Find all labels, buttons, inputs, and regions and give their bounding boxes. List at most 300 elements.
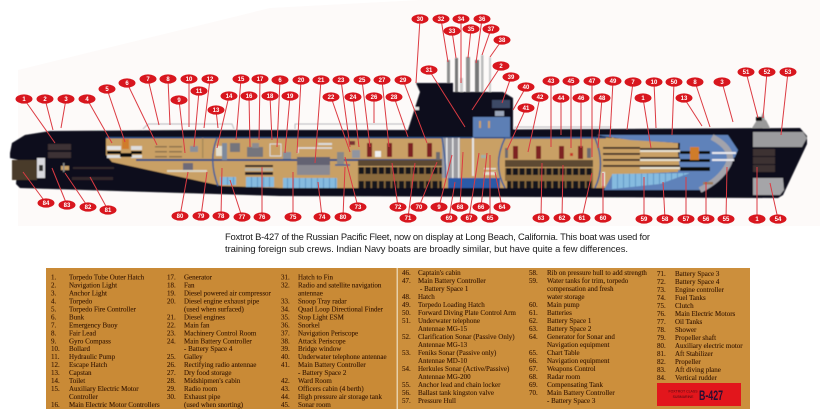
legend column items 17-30: 25. (167, 353, 176, 361)
callout 74: 74 (319, 215, 326, 221)
legend column items 17-30: 21. (167, 314, 176, 322)
callout 71 (400, 163, 416, 223)
legend column items 58-70: 58. (529, 269, 538, 277)
callout 56: 56 (703, 217, 710, 223)
aft machinery (216, 143, 291, 175)
callout 25 (354, 75, 370, 147)
callout 73: 73 (355, 205, 362, 211)
legend column items 17-30: 30. (167, 393, 176, 401)
callout 67: 67 (466, 216, 473, 222)
legend column items 58-70: 61. (529, 309, 538, 317)
legend column items 1-16: Torpedo (69, 298, 93, 306)
caption (225, 231, 650, 254)
callout 37 (482, 24, 500, 55)
callout 19 (282, 91, 298, 153)
callout 48 (594, 93, 610, 148)
forward torpedoes (640, 147, 736, 184)
legend column items 31-45: 33. (281, 298, 290, 306)
legend column items 1-16: 15. (51, 385, 60, 393)
callout 1 aft (16, 94, 55, 143)
callout 23 (332, 75, 350, 147)
legend column items 31-45: Attack Periscope (298, 338, 346, 346)
callout 72: 72 (395, 205, 402, 211)
legend column items 46-57: 56. (402, 389, 411, 397)
legend column items 31-45: 39. (281, 345, 290, 353)
legend column items 17-30: Machinery Control Room (184, 330, 257, 338)
legend column items 1-16: Toilet (69, 377, 85, 385)
callout 2 fin: 2 (499, 64, 503, 70)
callout 80 aft: 80 (177, 214, 184, 220)
callout 28: 28 (391, 95, 398, 101)
legend column items 17-30: 19. (167, 290, 176, 298)
callout 37: 37 (488, 27, 495, 33)
callout 59: 59 (641, 217, 648, 223)
legend column items 31-45: 36. (281, 322, 290, 330)
legend column items 46-57: Herkules Sonar (Active/Passive) (418, 365, 510, 373)
legend column items 71-84: 81. (657, 350, 666, 358)
callout 78 (212, 168, 230, 221)
legend column items 58-70: 64. (529, 333, 538, 341)
fuel tanks (283, 178, 337, 188)
legend column items 71-84: 73. (657, 286, 666, 294)
callout 21: 21 (318, 78, 325, 84)
callout 16 (240, 91, 258, 147)
legend column items 58-70: 68. (529, 373, 538, 381)
legend column items 1-16: 12. (51, 361, 60, 369)
legend column items 1-16: 6. (51, 314, 56, 322)
callout 11 (190, 86, 208, 147)
legend column items 71-84: Battery Space 3 (675, 270, 720, 278)
legend column items 58-70 (529, 269, 647, 405)
callout 39 (502, 72, 520, 103)
legend column items 1-16: Bunk (69, 314, 85, 322)
legend column items 17-30: 18. (167, 282, 176, 290)
callout 40: 40 (523, 85, 530, 91)
callout 77 (230, 180, 250, 222)
callout 4: 4 (85, 97, 89, 103)
legend column items 58-70: Generator for Sonar and (547, 333, 615, 341)
callout 48: 48 (599, 96, 606, 102)
background paper (18, 0, 820, 226)
callout 45: 45 (568, 79, 575, 85)
legend column items 71-84: Clutch (675, 302, 694, 310)
callout 56 (698, 182, 714, 224)
callout 51 (738, 67, 758, 118)
legend column items 71-84: 77. (657, 318, 666, 326)
callout 62 (554, 165, 570, 223)
callout 14 (217, 91, 238, 148)
callout 62: 62 (559, 216, 566, 222)
legend column items 1-16: 5. (51, 306, 56, 314)
legend column items 58-70: Main pump (547, 301, 580, 309)
legend column items 1-16: Hydraulic Pump (69, 353, 116, 361)
callout 77: 77 (239, 215, 246, 221)
legend column items 46-57: 50. (402, 309, 411, 317)
callout 68: 68 (457, 205, 464, 211)
forward sail (752, 112, 770, 128)
deck rails (143, 124, 612, 129)
legend column items 46-57: Forward Diving Plate Control Arm (418, 309, 517, 317)
callout 65 (482, 155, 498, 223)
legend column items 17-30: 26. (167, 361, 176, 369)
callout 54: 54 (775, 217, 782, 223)
callout 29: 29 (400, 78, 407, 84)
tan interior (106, 137, 678, 188)
callout 58 (656, 182, 674, 224)
callout 59 (636, 177, 652, 224)
callout 38: 38 (499, 38, 506, 44)
legend column items 31-45: 42. (281, 377, 290, 385)
callout 35: 35 (468, 27, 475, 33)
legend column items 17-30: Rectifying radio antennae (184, 361, 256, 369)
callout 17: 17 (257, 77, 264, 83)
legend list right (402, 269, 743, 405)
callout 78: 78 (218, 214, 225, 220)
legend column items 58-70: Battery Space 1 (547, 317, 592, 325)
callout 71: 71 (405, 216, 412, 222)
callout 83 (52, 168, 76, 210)
callout 50: 50 (671, 80, 678, 86)
callout 31 (420, 65, 465, 127)
callout 21 (312, 75, 330, 163)
legend column items 71-84: Shower (675, 326, 697, 334)
callout 11: 11 (196, 89, 203, 95)
callout 52: 52 (764, 70, 771, 76)
legend column items 1-16: Torpedo Fire Controller (69, 306, 136, 314)
callout 6 aft (118, 78, 157, 145)
callout 36 (474, 14, 490, 63)
red B-427 badge: B-427 (699, 387, 723, 403)
callout 51: 51 (743, 70, 750, 76)
callout 16: 16 (246, 94, 253, 100)
caption: training foreign sub crews. Indian Navy boats are broadly similar, but have quite a few differences. (225, 243, 628, 254)
callout 44 (552, 93, 570, 135)
legend column items 17-30: 17. (167, 274, 176, 282)
red B-427 badge (657, 383, 741, 406)
legend column items 71-84: Oil Tanks (675, 318, 702, 326)
callout 6 mid: 6 (278, 78, 282, 84)
callout 66: 66 (478, 205, 485, 211)
callout 67 (460, 153, 479, 223)
callout 47: 47 (589, 79, 596, 85)
callout 49: 49 (610, 79, 617, 85)
legend column items 46-57: 51. (402, 317, 411, 325)
callout 35 (462, 24, 480, 58)
callout 46: 46 (578, 96, 585, 102)
fin blue section (473, 100, 510, 141)
legend column items 1-16: Emergency Buoy (69, 322, 118, 330)
callout 55 (718, 167, 734, 224)
fin window (415, 107, 419, 110)
legend column items 1-16: 9. (51, 338, 56, 346)
legend column items 46-57: Torpedo Loading Hatch (418, 301, 485, 309)
legend column items 46-57: - Battery Space 1 (420, 285, 469, 293)
legend column items 17-30: 23. (167, 330, 176, 338)
legend column items 31-45: Sonar room (298, 401, 331, 409)
callout 64 (494, 172, 510, 212)
callout 7 aft: 7 (146, 77, 150, 83)
legend column items 31-45: Ward Room (298, 377, 332, 385)
legend column items 1-16: 7. (51, 322, 56, 330)
left legend panel (46, 268, 397, 409)
callout 45 (562, 76, 580, 148)
callout 3 bow: 3 (720, 80, 724, 86)
rudder and aft stern (12, 144, 114, 180)
legend column items 58-70: 60. (529, 301, 538, 309)
legend column items 31-45: Underwater telephone antennae (298, 353, 387, 361)
legend column items 31-45: 37. (281, 330, 290, 338)
callout 32: 32 (438, 17, 445, 23)
callout 8 bow: 8 (693, 80, 697, 86)
legend column items 58-70: 66. (529, 357, 538, 365)
legend column items 31-45: - Battery Space 2 (298, 369, 347, 377)
forward blue ballast (596, 135, 738, 190)
callout 75 (284, 172, 302, 222)
legend column items 46-57: Underwater telephone (418, 317, 480, 325)
legend column items 71-84: 82. (657, 358, 666, 366)
callout 10 aft: 10 (186, 77, 193, 83)
legend column items 1-16: 3. (51, 290, 56, 298)
gray pressure bulkhead (700, 137, 730, 190)
legend column items 17-30: Diesel powered air compressor (184, 290, 272, 298)
callout 34 (452, 14, 470, 83)
legend column items 71-84: Propeller (675, 358, 701, 366)
legend column items 1-16: 8. (51, 330, 56, 338)
callout 14: 14 (226, 94, 233, 100)
callout 13 aft: 13 (213, 108, 220, 114)
callout 58: 58 (662, 217, 669, 223)
legend column items 17-30: 27. (167, 369, 176, 377)
callout 3 aft (58, 94, 74, 128)
callout 1 aft: 1 (22, 97, 26, 103)
legend column items 71-84: Battery Space 4 (675, 278, 720, 286)
legend column items 58-70: Water tanks for trim, torpedo (547, 277, 629, 285)
callout 60 (594, 173, 612, 223)
callout 20: 20 (298, 78, 305, 84)
callout 26 (366, 92, 382, 123)
callout 80 mid: 80 (340, 215, 347, 221)
hull (10, 128, 807, 198)
callout 43 (542, 76, 560, 147)
callout 65: 65 (487, 216, 494, 222)
aft compartment decks (106, 137, 606, 172)
callout 4 (78, 94, 112, 143)
legend column items 58-70: 59. (529, 277, 538, 285)
forward tan room (612, 137, 680, 173)
callout 29 (394, 75, 427, 143)
callout 12 (202, 74, 218, 128)
legend column items 31-45: Navigation Periscope (298, 330, 358, 338)
callout 10 bow: 10 (651, 80, 658, 86)
legend column items 1-16: 14. (51, 377, 60, 385)
callout 6 aft: 6 (125, 81, 129, 87)
callout 1 bow room (634, 93, 652, 148)
callout 26: 26 (371, 95, 378, 101)
legend column items 46-57: Antennae MD-10 (418, 357, 468, 365)
legend column items 17-30: (used when surfaced) (184, 306, 245, 314)
legend column items 1-16: Navigation Light (69, 282, 117, 290)
diesel engine (297, 141, 360, 175)
callout 72 (390, 163, 406, 212)
callout 8 aft (160, 74, 176, 125)
legend column items 58-70: 69. (529, 381, 538, 389)
divider between panels (396, 268, 398, 409)
legend column items 46-57: Hatch (418, 293, 435, 301)
legend column items 58-70: Weapons Control (547, 365, 596, 373)
callout 13 bow: 13 (681, 96, 688, 102)
aft small tanks (220, 177, 236, 185)
callout 60: 60 (600, 216, 607, 222)
legend column items 46-57: 49. (402, 301, 411, 309)
legend column items 17-30: Diesel engine exhaust pipe (184, 298, 259, 306)
legend column items 31-45: Stop Light ESM (298, 314, 345, 322)
callout 30: 30 (417, 17, 424, 23)
legend column items 31-45: Main Battery Controller (298, 361, 366, 369)
callout 68 (452, 152, 468, 212)
callout 36: 36 (479, 17, 486, 23)
forward torpedo racks (602, 147, 640, 186)
callout 39: 39 (508, 75, 515, 81)
legend column items 46-57 (402, 269, 517, 405)
legend column items 1-16: 13. (51, 369, 60, 377)
conning tower fin (407, 83, 513, 133)
callout 79: 79 (198, 214, 205, 220)
red B-427 badge: SUBMARINE (673, 395, 694, 399)
legend column items 17-30: Generator (184, 274, 213, 282)
legend column items 31-45: 32. (281, 282, 290, 290)
legend column items 31-45: 31. (281, 274, 290, 282)
callout 74 (314, 182, 330, 222)
callout 7 bow: 7 (631, 80, 635, 86)
legend column items 46-57: 46. (402, 269, 411, 277)
legend column items 46-57: Antennae MG-200 (418, 373, 471, 381)
callout 47 (584, 76, 600, 157)
legend column items 31-45: Bridge window (298, 345, 342, 353)
legend column items 1-16: 2. (51, 282, 56, 290)
callout 42 (528, 92, 548, 152)
callout 75: 75 (290, 215, 297, 221)
legend column items 71-84: 80. (657, 342, 666, 350)
legend column items 46-57: 57. (402, 397, 411, 405)
legend column items 46-57: Main Battery Controller (418, 277, 486, 285)
legend column items 58-70: Radar room (547, 373, 581, 381)
legend column items 1-16: 16. (51, 401, 60, 409)
callout 82 (65, 173, 96, 212)
callout 12: 12 (207, 77, 214, 83)
callout 63 (532, 163, 550, 223)
callout 57 (678, 177, 694, 224)
legend column items 71-84: 83. (657, 366, 666, 374)
legend column items 71-84: 71. (657, 270, 666, 278)
callout 53 (780, 67, 796, 135)
legend column items 17-30: - Battery Space 4 (184, 345, 233, 353)
callout 81: 81 (105, 208, 112, 214)
legend column items 46-57: 52. (402, 333, 411, 341)
callout 44: 44 (558, 96, 565, 102)
callout 81 (90, 177, 116, 215)
legend column items 71-84: Fuel Tanks (675, 294, 706, 302)
aft curved bulkhead (213, 138, 218, 186)
legend column items 17-30: Galley (184, 353, 203, 361)
callout 3 aft: 3 (64, 97, 68, 103)
callout 76: 76 (259, 215, 266, 221)
legend column items 46-57: 54. (402, 365, 411, 373)
legend column items 17-30: 24. (167, 338, 176, 346)
right legend panel (398, 268, 750, 409)
callout 61 (574, 173, 592, 223)
callout 32 (432, 14, 450, 62)
legend column items 58-70: water storage (547, 293, 585, 301)
legend column items 71-84: 79. (657, 334, 666, 342)
bow tanks (753, 132, 807, 195)
legend column items 1-16: Controller (69, 393, 98, 401)
legend column items 58-70: Chart Table (547, 349, 580, 357)
callout 18: 18 (267, 94, 274, 100)
legend column items 58-70: Main Battery Controller (547, 389, 615, 397)
legend column items 46-57: Antennae MG-15 (418, 325, 468, 333)
legend column items 17-30: Fan (184, 282, 195, 290)
callout 2 fin (472, 61, 510, 110)
legend column items 31-45: Officers cabin (4 berth) (298, 385, 364, 393)
callout 30 (412, 14, 428, 83)
legend column items 58-70: Navigation equipment (547, 357, 609, 365)
legend column items 1-16: Main Electric Motor Controllers (69, 401, 160, 409)
callout 57: 57 (683, 217, 690, 223)
legend column items 1-16: 11. (51, 353, 60, 361)
legend column items 1-16: Auxiliary Electric Motor (69, 385, 139, 393)
callout 19: 19 (287, 94, 294, 100)
legend column items 1-16: Escape Hatch (69, 361, 108, 369)
legend column items 31-45: Radio and satellite navigation (298, 282, 382, 290)
callout 27: 27 (379, 78, 386, 84)
callout 8 aft: 8 (166, 77, 170, 83)
legend column items 58-70: 70. (529, 389, 538, 397)
legend list left (51, 274, 387, 409)
callout 15: 15 (238, 77, 245, 83)
legend column items 17-30: Dry food storage (184, 369, 231, 377)
legend column items 58-70: Navigation equipment (547, 341, 609, 349)
forward curved bulkheads (442, 138, 600, 188)
callout 17 (252, 74, 268, 140)
callout 82: 82 (85, 205, 92, 211)
legend column items 31-45: 43. (281, 385, 290, 393)
legend column items 31-45: Snoop Tray radar (298, 298, 347, 306)
legend column items 17-30: 22. (167, 322, 176, 330)
legend column items 31-45: 34. (281, 306, 290, 314)
legend column items 31-45 (281, 274, 387, 409)
callout 8 bow (686, 77, 710, 127)
legend column items 17-30: 20. (167, 298, 176, 306)
legend column items 31-45: 41. (281, 361, 290, 369)
legend column items 58-70: 63. (529, 325, 538, 333)
control room (442, 138, 500, 188)
callout 27 (374, 75, 390, 147)
callout 1 bow room: 1 (641, 96, 645, 102)
legend column items 1-16: 10. (51, 345, 60, 353)
legend column items 17-30 (167, 274, 272, 409)
callout 55: 55 (723, 217, 730, 223)
legend column items 1-16: Anchor Light (69, 290, 107, 298)
legend column items 31-45: 45. (281, 401, 290, 409)
red B-427 badge: FOXTROT CLASS (668, 390, 698, 394)
callout 52 (758, 67, 776, 118)
callout 24: 24 (350, 95, 357, 101)
callout 66 (472, 153, 490, 212)
callout 5: 5 (105, 87, 109, 93)
callout 2 aft (36, 94, 54, 130)
callout 40 (513, 82, 534, 110)
callout 49 (604, 76, 622, 137)
